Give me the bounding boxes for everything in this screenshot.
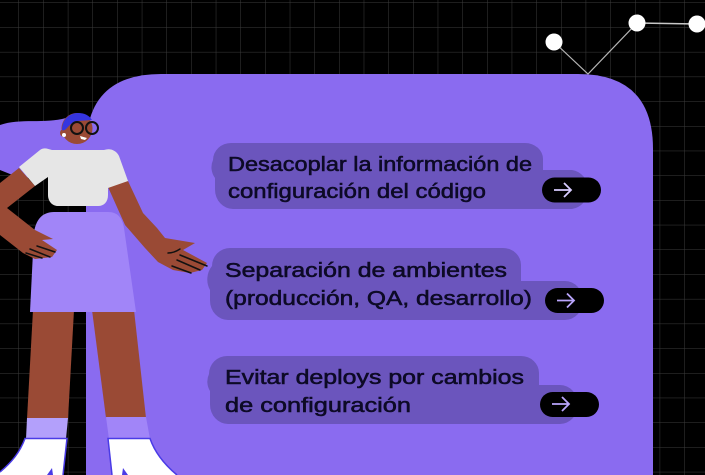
text: Evitar deploys por cambios — [225, 366, 524, 389]
skirt — [30, 212, 136, 312]
panel: main purple card — [86, 74, 653, 475]
socks — [26, 417, 150, 439]
arrow button — [545, 288, 604, 313]
item 2: environments: (producción, QA, desarrollo) — [225, 287, 532, 310]
shirt — [19, 148, 128, 206]
network decoration — [546, 14, 705, 74]
shoes — [0, 438, 177, 475]
text: Separación de ambientes — [225, 259, 507, 282]
arrow button — [540, 392, 599, 417]
text: Desacoplar la información de — [228, 153, 532, 176]
right arm and hand — [108, 181, 207, 273]
right leg — [92, 310, 146, 418]
item 1: decoupling — [211, 143, 601, 209]
illustration: woman presenting — [0, 113, 207, 475]
item 1: decoupling: configuración del código — [228, 180, 486, 203]
item 2: environments — [207, 248, 604, 320]
hair — [0, 118, 96, 178]
left arm and hand — [0, 168, 57, 259]
item 3: avoid deploys: de configuración — [225, 394, 411, 417]
item 3: avoid deploys — [207, 356, 599, 424]
head — [60, 113, 98, 144]
left leg — [27, 310, 74, 419]
arrow button — [542, 178, 601, 202]
